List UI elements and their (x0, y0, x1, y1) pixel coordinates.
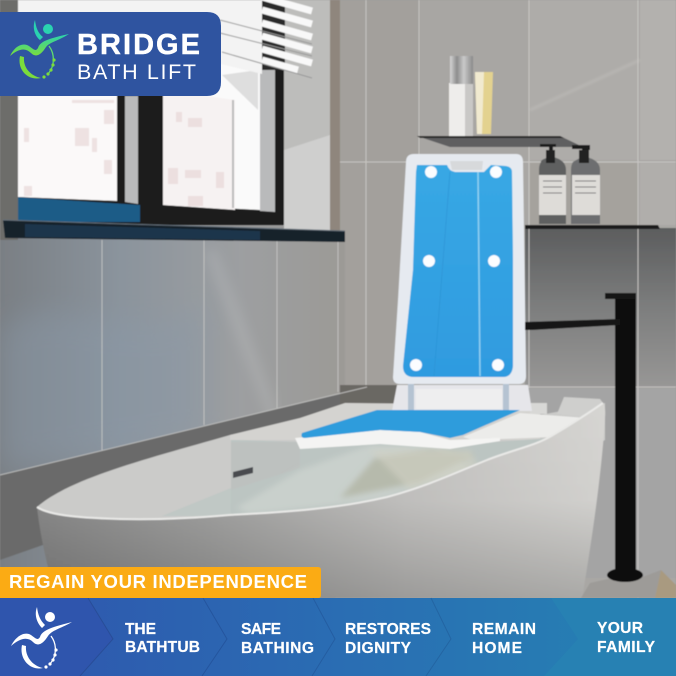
right cover (463, 413, 587, 440)
nav item: remain home: REMAIN (472, 621, 536, 638)
upper shelf with toiletries (417, 56, 583, 147)
nav item: restores dignity: RESTORES (345, 621, 431, 638)
head rest (557, 397, 603, 418)
white seat frame (295, 430, 500, 449)
bathtub back and inside (37, 397, 605, 525)
nav item: the bathtub: BATHTUB (125, 639, 200, 656)
icon: white figure (11, 607, 72, 669)
tagline text: REGAIN YOUR INDEPENDENCE (9, 571, 307, 592)
tub interior (37, 403, 605, 525)
blue seat (301, 410, 520, 438)
tagline banner (0, 567, 321, 598)
nav item: your family: YOUR (597, 620, 643, 637)
nav item: remain home: HOME (472, 640, 522, 657)
bathtub front body (37, 403, 605, 598)
faucet (525, 293, 636, 576)
window (0, 0, 340, 240)
chevron dividers (0, 598, 676, 676)
right wall tiles (335, 0, 676, 600)
icon: brand figure (10, 20, 69, 79)
window blinds (18, 0, 312, 78)
lift seat base (392, 384, 532, 411)
brand subtitle: BATH LIFT (77, 60, 196, 84)
left lower wall tiles (0, 238, 400, 578)
soap bottles and lower shelf (525, 144, 660, 229)
bottom navigation band (0, 598, 676, 676)
tub back ledge (230, 403, 540, 440)
nav item: restores dignity: DIGNITY (345, 640, 412, 657)
nav item: your family: FAMILY (597, 639, 656, 656)
lift backrest (393, 154, 526, 384)
brand name: BRIDGE (77, 29, 200, 61)
brand logo panel (0, 12, 221, 96)
window sill (3, 220, 345, 242)
nav item: the bathtub: THE (125, 621, 156, 638)
stone platform (581, 568, 676, 598)
lift seat (295, 410, 587, 449)
nav item: safe bathing: BATHING (241, 640, 314, 657)
nav item: safe bathing: SAFE (241, 621, 281, 638)
water view (231, 438, 553, 516)
